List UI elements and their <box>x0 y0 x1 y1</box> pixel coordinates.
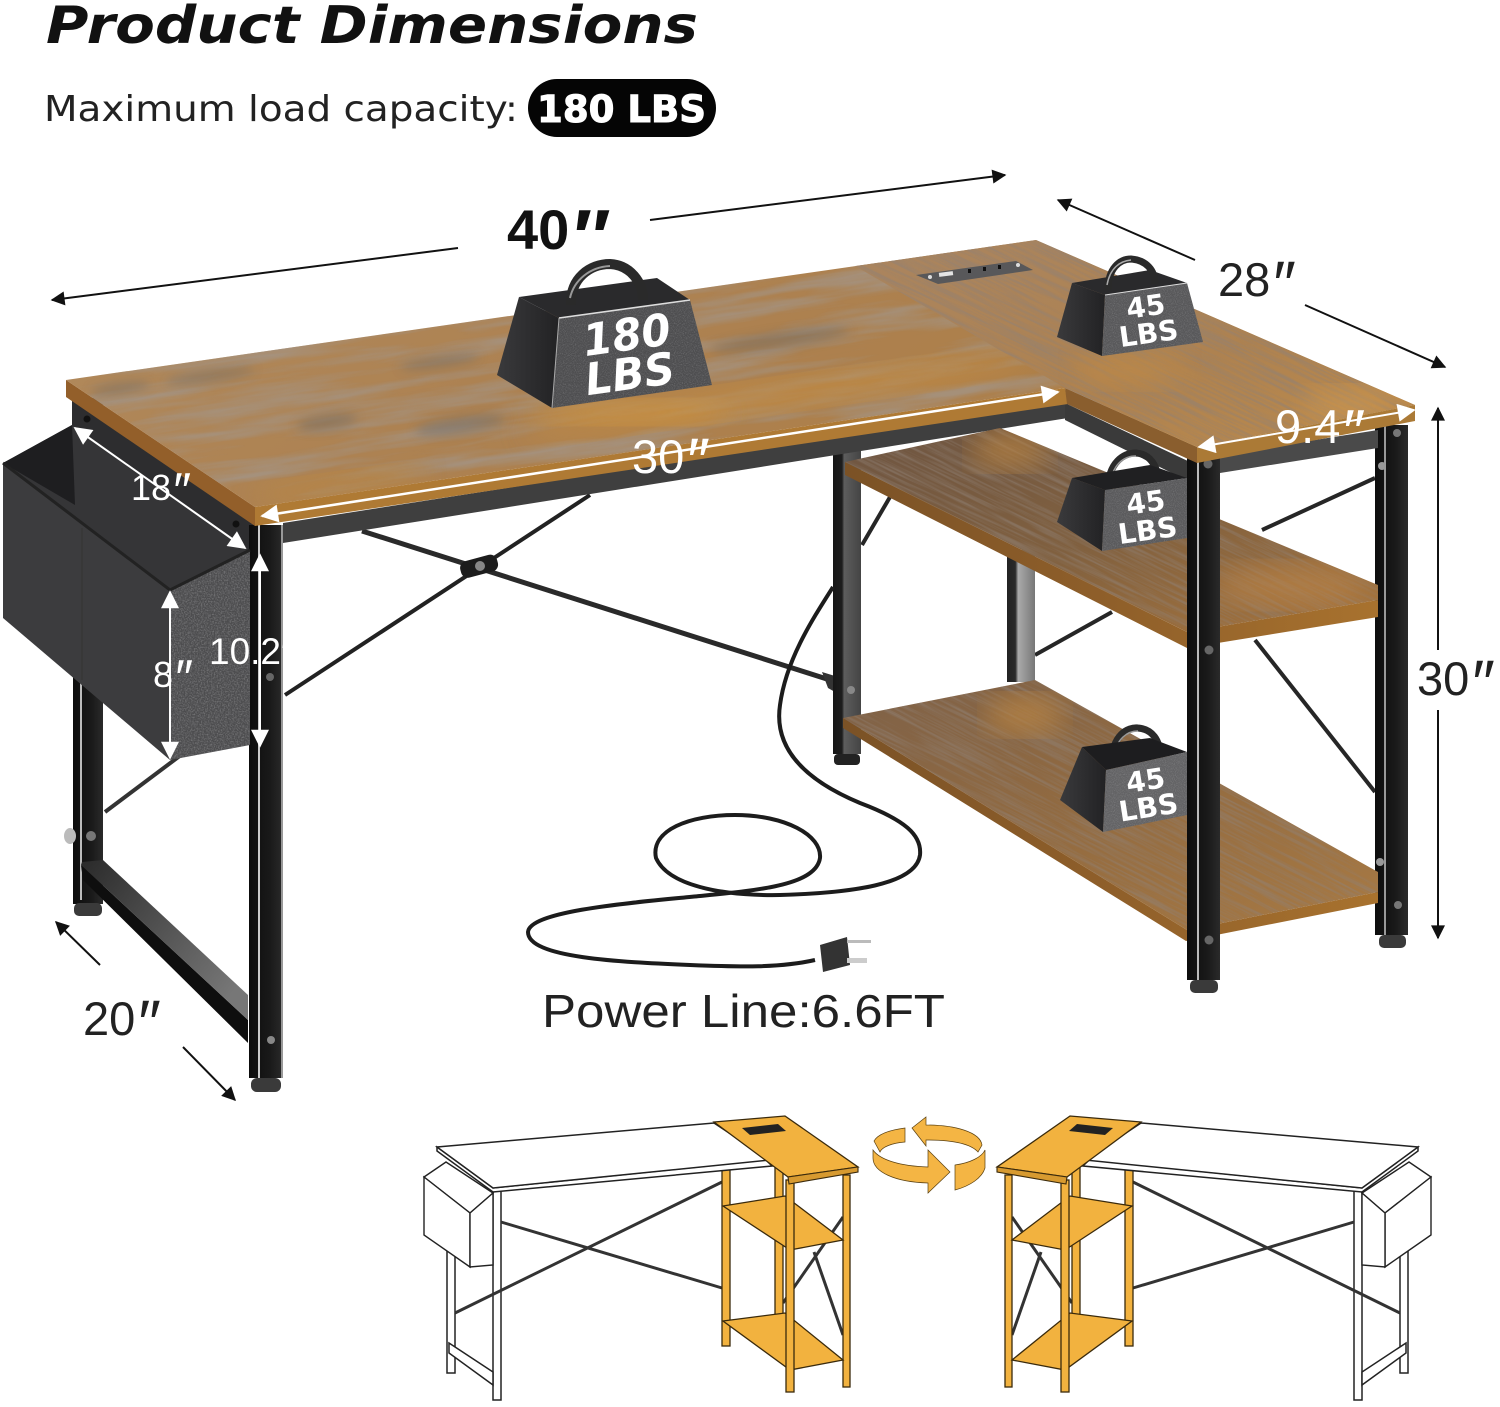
weight: 45 LBS on return top: 45 <box>1124 288 1167 326</box>
legs and bars <box>447 1188 501 1400</box>
weight: 45 LBS on upper shelf <box>1057 453 1190 555</box>
dimension: 8 inch pocket height <box>153 592 193 758</box>
orange front leg <box>786 1180 794 1392</box>
lower shelf <box>843 680 1378 941</box>
dimension: 8 inch pocket height: 8 <box>153 654 173 695</box>
dimension: 18 inch pocket width: 18 <box>131 467 171 508</box>
load capacity pill: 180 LBS <box>537 88 706 131</box>
dimension: 9.4 inch return width <box>1199 398 1414 467</box>
cross brace bars <box>285 495 835 695</box>
dimension: 9.4 inch return width: 9.4 <box>1275 400 1340 453</box>
dimension: 20 inch leg depth <box>56 922 235 1100</box>
load capacity line <box>44 79 716 137</box>
orange legs <box>722 1165 850 1387</box>
desktop edges <box>66 380 1415 526</box>
orange shelves <box>723 1196 843 1370</box>
weight: 180 LBS <box>497 264 715 410</box>
load capacity line: Maximum load capacity: <box>44 89 518 130</box>
dimension: 8 inch pocket height: ″ <box>173 650 193 706</box>
desk illustration <box>2 182 1434 1092</box>
desktop white section <box>437 1123 772 1192</box>
front left leg <box>249 525 283 1092</box>
reversible diagram: mirrored configuration <box>997 1116 1431 1400</box>
dimension: 28 inch depth <box>1058 200 1445 367</box>
rotation icon <box>873 1117 985 1193</box>
left side bottom beam <box>81 860 248 1043</box>
left side brace <box>105 752 185 812</box>
return rails <box>1065 403 1190 482</box>
dimension: 28 inch depth: ″ <box>1270 248 1295 320</box>
dimension: 30 inch height: 30 <box>1417 652 1469 705</box>
dimension: 18 inch pocket width: ″ <box>171 463 191 519</box>
dimension: 40 inch width: 40 <box>507 198 569 261</box>
rear left leg <box>64 398 103 916</box>
dimension: 40 inch width: ″ <box>569 193 610 281</box>
power strip <box>742 1124 786 1135</box>
weight: 45 LBS on upper shelf: LBS <box>1116 510 1179 551</box>
weight: 45 LBS on upper shelf: 45 <box>1124 484 1167 522</box>
power line label: Power Line:6.6FT <box>542 985 945 1037</box>
weight: 45 LBS on lower shelf: 45 <box>1124 761 1167 800</box>
dimension: 30 inch front edge: 30 <box>632 430 684 483</box>
dimension: 18 inch pocket width <box>75 428 245 548</box>
dimension: 30 inch front edge: ″ <box>684 425 709 497</box>
power cord <box>528 587 920 966</box>
left side top rail <box>72 397 255 553</box>
reversible diagram: left configuration <box>424 1116 858 1400</box>
desktop surface <box>66 240 1415 507</box>
inner rear leg <box>1007 550 1035 682</box>
weight: 45 LBS on return top <box>1057 259 1205 360</box>
upper shelf <box>845 428 1378 648</box>
dimension: 20 inch leg depth: 20 <box>83 992 135 1045</box>
front right leg <box>1187 450 1220 993</box>
middle leg <box>833 450 861 765</box>
desktop orange return <box>714 1116 858 1177</box>
weight: 45 LBS on lower shelf <box>1060 728 1190 835</box>
load capacity pill <box>528 79 716 137</box>
dimension: 20 inch leg depth: ″ <box>135 987 160 1059</box>
dimension: 30 inch height <box>1417 408 1494 938</box>
cross brace lines <box>455 1182 843 1335</box>
plug <box>820 937 871 972</box>
weight: 45 LBS on return top: LBS <box>1117 313 1180 354</box>
dimension: 28 inch depth: 28 <box>1218 253 1270 306</box>
dimension: 9.4 inch return width: ″ <box>1340 398 1364 467</box>
weight: 45 LBS on lower shelf: LBS <box>1117 787 1180 829</box>
power strip <box>916 261 1033 284</box>
back right leg <box>1375 425 1408 948</box>
weight: 180 LBS: 180 <box>580 304 674 367</box>
front rail <box>283 400 1068 543</box>
dimension: 10.2 inch pocket drop: 10.2″ <box>209 631 294 672</box>
weight: 180 LBS: LBS <box>582 343 678 406</box>
dimension: 30 inch front edge <box>262 392 1058 516</box>
right section rear braces <box>862 478 1375 792</box>
dimension: 30 inch height: ″ <box>1469 647 1494 719</box>
bolts on side rail <box>84 416 240 528</box>
storage pocket <box>3 425 255 765</box>
hanging pocket <box>424 1162 493 1267</box>
dimension: 40 inch width <box>52 175 1005 300</box>
